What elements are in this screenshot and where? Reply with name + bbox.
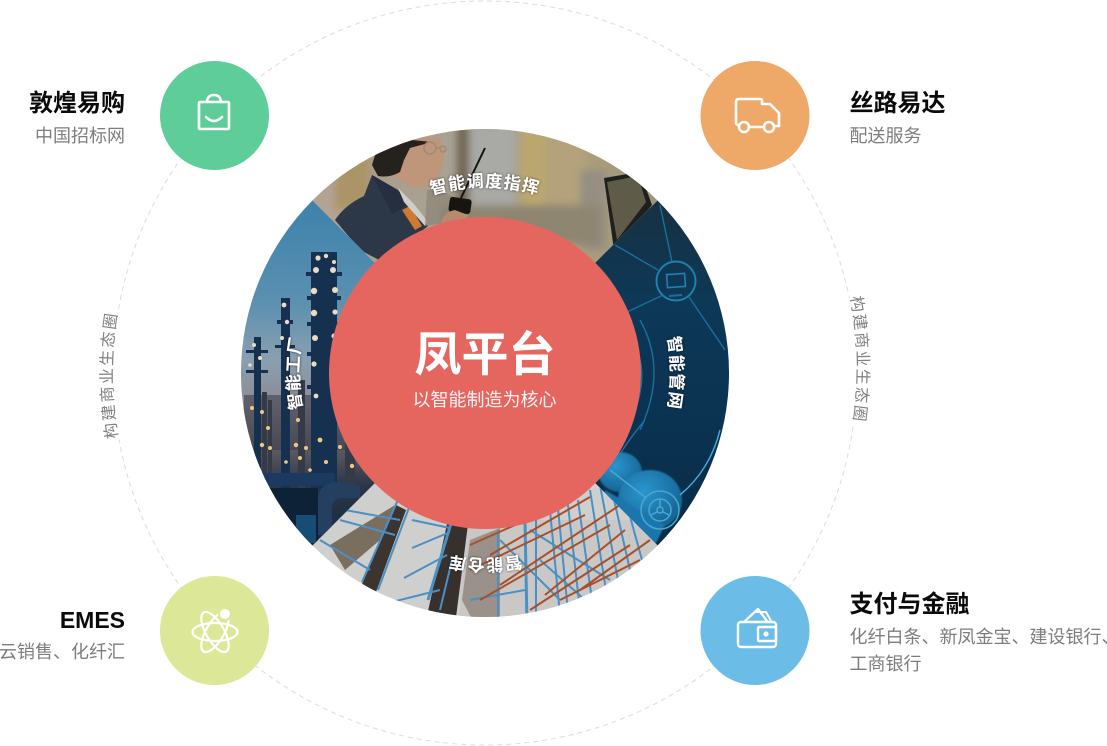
icon: shopping bag [160,61,269,170]
sector label left: 智能工厂 [284,336,304,411]
text: finance partners [850,627,1107,674]
main tower [246,252,342,507]
ring label right: 构建商业生态圈 [850,296,871,421]
icon: delivery truck [700,61,810,170]
ring label left: 构建商业生态圈 [99,314,118,439]
centre circle [329,217,641,529]
man [388,136,445,187]
icon: wallet [700,576,810,685]
heading: payment and finance: 支付与金融 [850,590,970,618]
panel: smart pipeline network photo [595,200,729,546]
text: delivery service: 配送服务 [850,126,922,146]
centre title: 凤平台 [414,328,556,381]
lights [248,254,338,398]
text: finance partners: 工商银行 [850,654,922,674]
panel: smart warehouse photo [312,483,658,617]
monitor [604,172,652,250]
panel: smart dispatch photo [312,129,658,263]
sector label top: 智能调度指挥 [428,172,541,196]
sector label right: 智能管网 [666,335,686,410]
centre subtitle: 以智能制造为核心 [412,390,556,410]
text: cloud sales: 云销售、化纤汇 [0,642,125,662]
photo disc [230,120,740,630]
sector label bottom: 智能仓库 [448,553,524,574]
distant plant [244,380,364,490]
heading: Dunhuang Yigou: 敦煌易购 [29,90,125,117]
gloved hand [595,452,682,545]
panel: smart factory photo [241,200,375,546]
heading: EMES: EMES [60,607,125,633]
heading: Silu Yida: 丝路易达 [850,90,946,117]
pipes [260,473,335,486]
dashed outer ring [98,1,874,745]
icon: atom [160,576,269,685]
text: bidding network: 中国招标网 [35,126,125,146]
